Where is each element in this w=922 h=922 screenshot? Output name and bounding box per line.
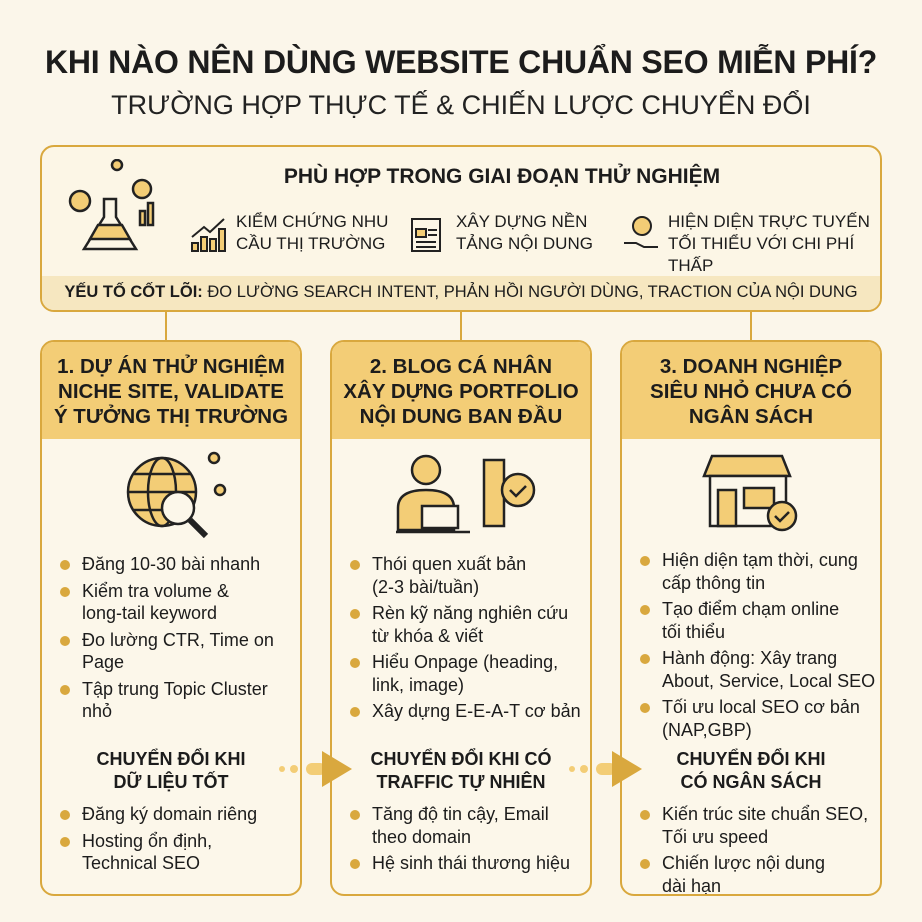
bullets 2b: theo domain [372, 826, 471, 846]
subheading 1: DỮ LIỆU TỐT [114, 772, 228, 792]
item: presence: HIỆN DIỆN TRỰC TUYẾN [668, 212, 870, 231]
bullets 3: Tối ưu local SEO cơ bản [662, 697, 860, 717]
header 3: 3. DOANH NGHIỆP [660, 355, 842, 378]
bullets 1 [60, 554, 274, 721]
header 1 [42, 342, 300, 439]
bullets 1b: Technical SEO [82, 853, 200, 873]
connector lines [165, 312, 167, 340]
icon: globe search [126, 452, 226, 538]
bullets 2: từ khóa & viết [372, 626, 483, 646]
item: presence: TỐI THIỂU VỚI CHI PHÍ [668, 234, 854, 253]
item: market: KIỂM CHỨNG NHU [236, 212, 388, 231]
subheading 2: CHUYỂN ĐỔI KHI CÓ [370, 749, 552, 769]
bullets 3b: dài hạn [662, 876, 721, 896]
bullets 2: Xây dựng E-E-A-T cơ bản [372, 701, 581, 721]
bullets 2: Hiểu Onpage (heading, [372, 652, 558, 672]
bullets 2b: Hệ sinh thái thương hiệu [372, 853, 570, 873]
arrow 1 [279, 751, 352, 787]
item: content [411, 212, 593, 253]
bullets 2: Thói quen xuất bản [372, 554, 526, 574]
bullets 3 [640, 550, 875, 740]
subheading 2: TRAFFIC TỰ NHIÊN [377, 772, 545, 792]
bullets 3: cấp thông tin [662, 572, 765, 592]
bullets 2: Rèn kỹ năng nghiên cứu [372, 603, 568, 623]
bullets 1b [60, 804, 257, 873]
bullets 1: long-tail keyword [82, 603, 217, 623]
item: market [191, 212, 388, 253]
bullets 3b: Tối ưu speed [662, 826, 768, 846]
bullets 1: Kiểm tra volume & [82, 580, 229, 600]
header 1: NICHE SITE, VALIDATE [58, 380, 284, 403]
bullets 1: nhỏ [82, 701, 112, 721]
subheading 3 [676, 748, 826, 792]
subtitle: TRƯỜNG HỢP THỰC TẾ & CHIẾN LƯỢC CHUYỂN ĐỔI [111, 90, 811, 120]
icon: flask [68, 159, 154, 250]
header 3: NGÂN SÁCH [689, 405, 813, 428]
bullets 3: About, Service, Local SEO [662, 670, 875, 690]
item: content: TẢNG NỘI DUNG [456, 234, 593, 253]
subheading 3: CHUYỂN ĐỔI KHI [676, 749, 826, 769]
header 2: 2. BLOG CÁ NHÂN [370, 355, 552, 378]
panel: top stage [40, 145, 882, 312]
bullets 1: Đăng 10-30 bài nhanh [82, 554, 260, 574]
item: presence: THẤP [668, 256, 713, 275]
bullets 3: Hành động: Xây trang [662, 648, 837, 668]
bullets 3: Hiện diện tạm thời, cung [662, 550, 858, 570]
panel: column 1 [40, 340, 302, 896]
bullets 3: tối thiểu [662, 622, 725, 642]
subheading 1 [96, 748, 246, 792]
panel: column 2 [330, 340, 592, 896]
bullets 1: Page [82, 652, 124, 672]
header 3 [622, 342, 880, 439]
subheading 1: CHUYỂN ĐỔI KHI [96, 749, 246, 769]
icon: blogger [396, 454, 536, 534]
bullets 2: (2-3 bài/tuần) [372, 576, 479, 596]
bullets 3: (NAP,GBP) [662, 720, 752, 740]
title: KHI NÀO NÊN DÙNG WEBSITE CHUẨN SEO MIỄN PHÍ? [45, 44, 877, 80]
bullets 2b: Tăng độ tin cậy, Email [372, 804, 549, 824]
bullets 3b: Kiến trúc site chuẩn SEO, [662, 804, 868, 824]
subheading 3: CÓ NGÂN SÁCH [680, 772, 822, 792]
bullets 1b: Hosting ổn định, [82, 830, 212, 850]
item: content: XÂY DỰNG NỀN [456, 212, 587, 231]
item: market: CẦU THỊ TRƯỜNG [236, 234, 385, 253]
bullets 1: Tập trung Topic Cluster [82, 678, 268, 698]
header 1: 1. DỰ ÁN THỬ NGHIỆM [57, 355, 285, 378]
arrow 2 [569, 751, 642, 787]
bullets 2b [350, 804, 570, 873]
subheading 2 [370, 748, 552, 792]
bullets 1: Đo lường CTR, Time on [82, 630, 274, 650]
header 2: XÂY DỰNG PORTFOLIO [343, 380, 579, 403]
bullets 3: Tạo điểm chạm online [662, 599, 839, 619]
header 2: NỘI DUNG BAN ĐẦU [360, 405, 562, 428]
header 1: Ý TƯỞNG THỊ TRƯỜNG [54, 405, 288, 428]
panel: column 3 [620, 340, 882, 896]
heading: stage: PHÙ HỢP TRONG GIAI ĐOẠN THỬ NGHIỆM [284, 165, 720, 188]
item: presence [624, 212, 870, 275]
bullets 3b [640, 804, 868, 896]
core factors band: YẾU TỐ CỐT LÕI: ĐO LƯỜNG SEARCH INTENT, PHẢN HỒI NGƯỜI DÙNG, TRACTION CỦA NỘI DUNG [64, 283, 858, 301]
core factors band [42, 276, 880, 310]
bullets 3b: Chiến lược nội dung [662, 853, 825, 873]
bullets 2: link, image) [372, 674, 464, 694]
icon: shop [702, 454, 798, 532]
bullets 2 [350, 554, 581, 721]
header 3: SIÊU NHỎ CHƯA CÓ [650, 380, 852, 403]
header 2 [332, 342, 590, 439]
bullets 1b: Đăng ký domain riêng [82, 804, 257, 824]
